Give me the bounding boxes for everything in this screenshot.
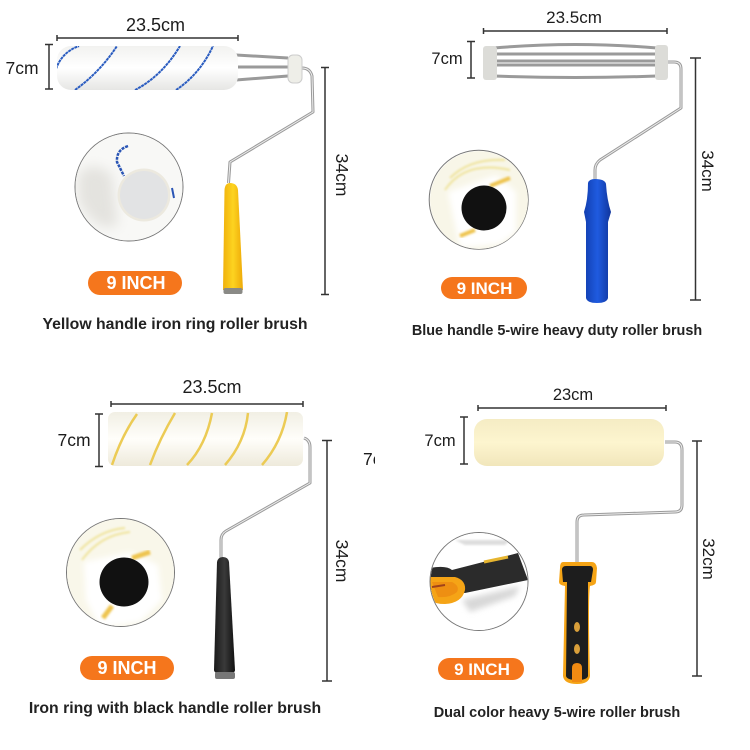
five-wire cage — [483, 44, 668, 80]
detail circle: roller end — [75, 133, 183, 241]
badge: 9 INCH: 9 INCH — [106, 273, 166, 293]
height dimension: 32cm — [692, 441, 718, 676]
height dimension: 34cm — [322, 440, 352, 681]
height dimension: 7cm — [57, 414, 103, 466]
metal arm — [221, 438, 310, 558]
height dimension: 7cm: 7cm — [5, 58, 39, 78]
height dimension: 34cm — [690, 58, 717, 300]
badge: 9 INCH — [88, 271, 182, 295]
cropped stray label: 7cm — [363, 449, 396, 469]
height dimension: 32cm: 32cm — [699, 538, 718, 580]
caption: Blue handle 5-wire heavy duty roller brush — [412, 323, 702, 339]
width dimension: 23.5cm — [484, 8, 667, 34]
width dimension: 23.5cm — [111, 377, 303, 407]
handle: blue — [584, 179, 611, 303]
roller cover with yellow stripes — [108, 412, 303, 466]
width dimension: 23cm — [478, 386, 666, 411]
panel: iron ring with black handle roller brush — [29, 377, 396, 717]
height dimension: 7cm: 7cm — [431, 50, 463, 68]
height dimension: 7cm — [431, 42, 475, 78]
width dimension: 23.5cm — [57, 15, 238, 41]
handle: black and orange — [559, 562, 597, 684]
badge: 9 INCH — [441, 277, 527, 299]
detail circle: handle close-up — [428, 532, 528, 630]
height dimension: 7cm: 7cm — [57, 430, 91, 450]
caption: Yellow handle iron ring roller brush — [42, 316, 308, 333]
width dimension: 23.5cm: 23.5cm — [182, 377, 242, 397]
roller cover with blue stripes — [56, 46, 238, 90]
roller cover: cream — [474, 419, 664, 466]
caption: Iron ring with black handle roller brush — [29, 700, 321, 717]
detail circle: roller end — [429, 150, 528, 249]
panel: yellow handle iron ring roller brush — [5, 15, 352, 333]
metal arm — [577, 442, 682, 562]
badge: 9 INCH: 9 INCH — [457, 279, 512, 298]
caption: Dual color heavy 5-wire roller brush — [434, 705, 680, 721]
width dimension: 23cm: 23cm — [553, 386, 593, 404]
badge: 9 INCH: 9 INCH — [97, 658, 157, 678]
badge: 9 INCH — [80, 656, 174, 680]
height dimension: 34cm: 34cm — [332, 154, 352, 196]
width dimension: 23.5cm: 23.5cm — [546, 8, 602, 27]
height dimension: 7cm — [5, 44, 53, 89]
badge: 9 INCH — [438, 658, 524, 680]
handle: black — [214, 557, 235, 679]
panel: blue handle 5-wire heavy duty roller brush — [412, 8, 717, 339]
height dimension: 7cm — [424, 417, 468, 464]
height dimension: 34cm: 34cm — [698, 150, 717, 192]
metal arm — [595, 62, 681, 180]
width dimension: 23.5cm: 23.5cm — [126, 15, 185, 35]
badge: 9 INCH: 9 INCH — [454, 660, 510, 679]
detail circle: roller end — [66, 518, 174, 628]
height dimension: 34cm — [321, 68, 352, 294]
handle: yellow — [223, 183, 243, 294]
height dimension: 34cm: 34cm — [332, 540, 352, 582]
height dimension: 7cm: 7cm — [424, 432, 456, 450]
panel: dual color heavy 5-wire roller brush — [424, 386, 718, 721]
wire cage and arm — [228, 55, 313, 183]
